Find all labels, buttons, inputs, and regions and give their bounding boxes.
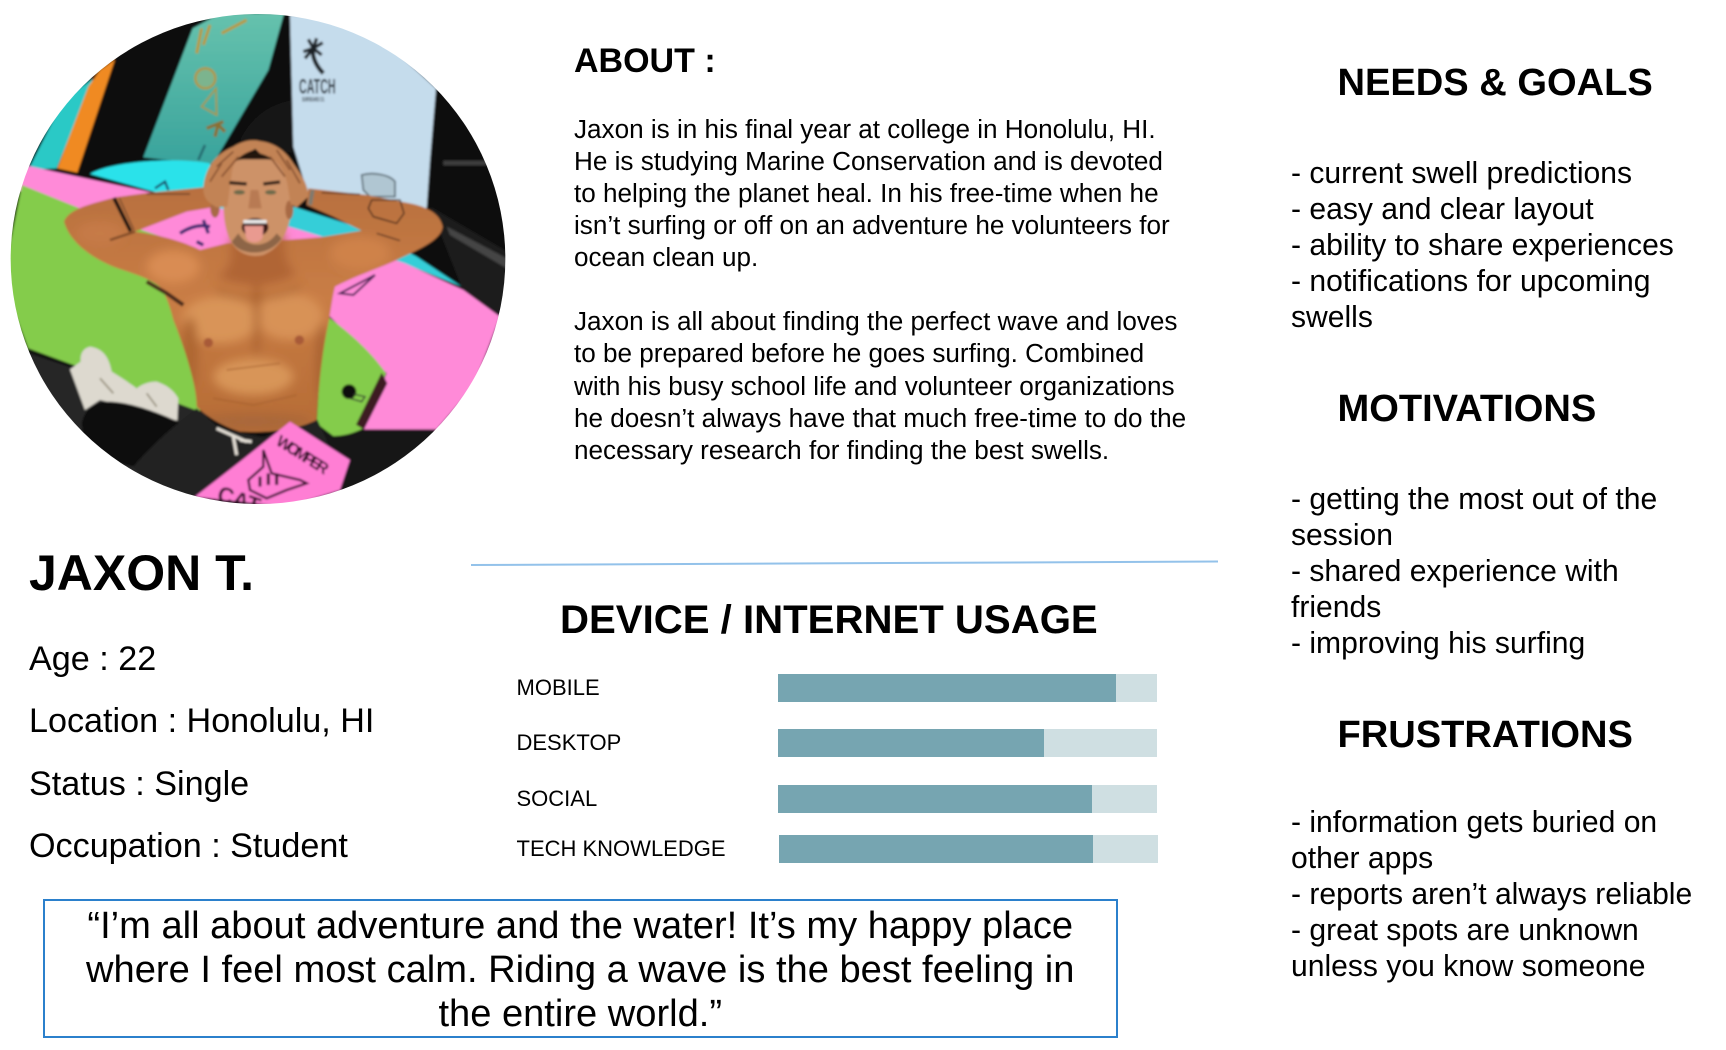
list: needs and goals: - notifications for upcoming xyxy=(1291,264,1650,298)
heading: about: ABOUT : xyxy=(574,42,716,80)
list: motivations: - improving his surfing xyxy=(1291,627,1585,660)
text block: about paragraphs: necessary research for finding the best swells. xyxy=(574,435,1109,465)
pink bodyboard with lettering: WOMPER xyxy=(273,433,332,479)
surfboards behind the surfer xyxy=(8,13,500,436)
list: frustrations: - reports aren’t always reliable xyxy=(1291,878,1692,910)
shorts xyxy=(136,408,328,503)
persona details xyxy=(29,640,374,865)
label: mobile: MOBILE xyxy=(516,675,600,700)
board logos xyxy=(155,20,395,295)
quote text xyxy=(86,905,1074,1035)
label: desktop: DESKTOP xyxy=(516,730,621,755)
quote text: the entire world.” xyxy=(438,993,722,1035)
heading: frustrations: FRUSTRATIONS xyxy=(1338,714,1633,756)
text block: about paragraphs xyxy=(574,114,1186,465)
label: social: SOCIAL xyxy=(516,786,597,811)
text block: about paragraphs: isn’t surfing or off on an adventure he volunteers for xyxy=(574,210,1170,240)
list: needs and goals: - current swell predictions xyxy=(1291,156,1632,190)
location: Location : Honolulu, HI xyxy=(29,702,374,740)
heading: device and internet usage: DEVICE / INTERNET USAGE xyxy=(560,597,1098,642)
board logos: SURFBOARD CO. xyxy=(302,96,325,103)
list: frustrations: - information gets buried on xyxy=(1291,806,1657,838)
list: needs and goals: - ability to share experiences xyxy=(1291,228,1674,262)
heading: needs and goals: NEEDS & GOALS xyxy=(1338,62,1653,104)
label: tech knowledge: TECH KNOWLEDGE xyxy=(516,836,726,861)
occupation: Occupation : Student xyxy=(29,827,348,865)
list: motivations xyxy=(1291,482,1657,660)
heading: motivations: MOTIVATIONS xyxy=(1338,388,1596,430)
list: needs and goals: - easy and clear layout xyxy=(1291,192,1594,226)
status: Status : Single xyxy=(29,765,249,803)
list: motivations: - shared experience with xyxy=(1291,555,1619,588)
text block: about paragraphs: ocean clean up. xyxy=(574,242,758,272)
text block: about paragraphs: he doesn’t always have that much free-time to do the xyxy=(574,403,1186,433)
list: frustrations: other apps xyxy=(1291,842,1433,874)
list: needs and goals xyxy=(1291,156,1674,334)
list: frustrations: - great spots are unknown xyxy=(1291,914,1639,946)
body shading xyxy=(77,222,390,429)
cloth xyxy=(70,347,178,421)
text block: about paragraphs: Jaxon is all about finding the perfect wave and loves xyxy=(574,306,1177,336)
list: needs and goals: swells xyxy=(1291,300,1373,334)
photo: surfer with surfboards in circular crop xyxy=(10,14,506,504)
list: motivations: friends xyxy=(1291,591,1381,624)
bar: mobile xyxy=(778,674,1157,702)
skateboard xyxy=(82,402,180,467)
quote text: where I feel most calm. Riding a wave is the best feeling in xyxy=(86,949,1074,991)
callout: quote xyxy=(43,898,1118,1038)
text block: about paragraphs: to helping the planet heal. In his free-time when he xyxy=(574,178,1159,208)
text block: about paragraphs: with his busy school life and volunteer organizations xyxy=(574,370,1175,400)
bar chart: device usage xyxy=(516,674,1158,863)
age: Age : 22 xyxy=(29,640,156,678)
persona name: JAXON T. xyxy=(29,545,254,601)
pink bodyboard with lettering xyxy=(194,420,352,504)
list: motivations: - getting the most out of the xyxy=(1291,482,1657,516)
list: motivations: session xyxy=(1291,519,1393,552)
bar: social xyxy=(778,785,1157,813)
text block: about paragraphs: to be prepared before he goes surfing. Combined xyxy=(574,338,1144,368)
text block: about paragraphs: Jaxon is in his final year at college in Honolulu, HI. xyxy=(574,114,1156,144)
list: frustrations xyxy=(1291,806,1692,982)
bar: desktop xyxy=(778,729,1157,757)
bar: tech knowledge xyxy=(778,835,1158,863)
quote text: “I’m all about adventure and the water! It’s my happy place xyxy=(87,905,1073,947)
board logos: CATCH xyxy=(299,75,336,99)
pink bodyboard with lettering: CAT xyxy=(214,481,264,518)
surfer figure xyxy=(64,140,443,432)
text block: about paragraphs: He is studying Marine Conservation and is devoted xyxy=(574,146,1163,176)
list: frustrations: unless you know someone xyxy=(1291,950,1645,982)
